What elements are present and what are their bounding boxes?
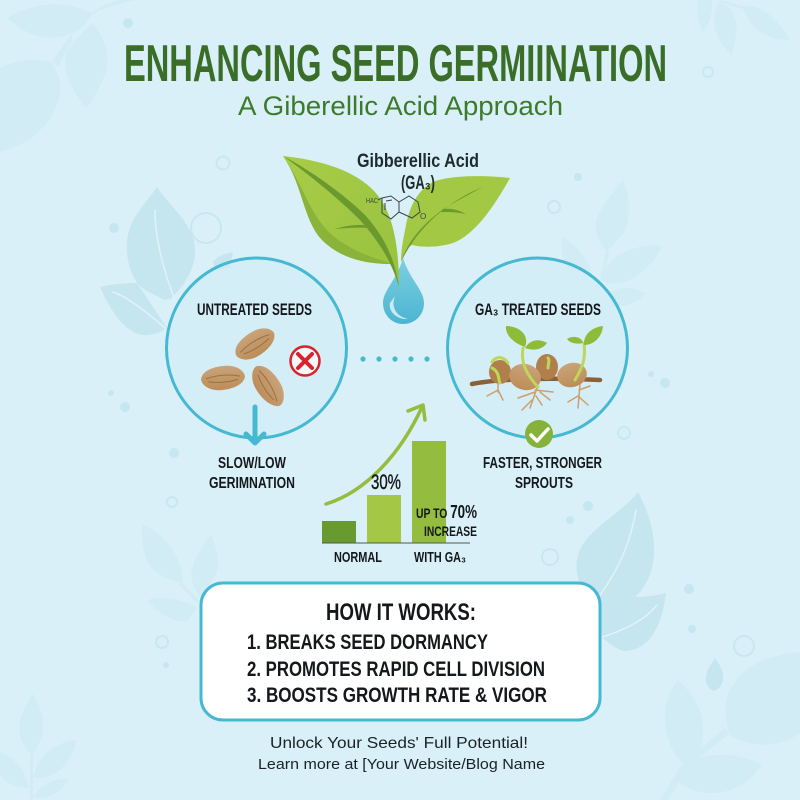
value: up to 70 percent increase: UP TO 70% bbox=[416, 502, 477, 522]
label: Gibberellic Acid: (GA₃) bbox=[401, 173, 435, 194]
background leaves: stronger bbox=[100, 187, 723, 691]
axis bbox=[322, 542, 470, 544]
chemical structure: HAC bbox=[366, 198, 378, 205]
icon: green check bbox=[525, 420, 553, 448]
icon: leaves with water drop bbox=[283, 156, 510, 324]
axis label: normal: NORMAL bbox=[334, 550, 382, 566]
footer text bbox=[258, 735, 545, 773]
label: faster stronger sprouts: SPROUTS bbox=[515, 475, 573, 492]
bar: with GA3 bbox=[412, 441, 446, 543]
value: up to 70 percent increase: INCREASE bbox=[424, 523, 477, 539]
connector dots bbox=[360, 356, 430, 362]
bar chart bbox=[322, 405, 477, 566]
icon: red cross bbox=[290, 346, 320, 376]
bar: 30 percent bbox=[367, 495, 401, 543]
value: 30 percent: 30% bbox=[371, 471, 401, 494]
label: Gibberellic Acid: Gibberellic Acid bbox=[357, 151, 479, 172]
list item 3: 3. BOOSTS GROWTH RATE & VIGOR bbox=[247, 683, 547, 707]
panel: how it works bbox=[201, 583, 600, 720]
label: slow germination: GERIMNATION bbox=[209, 475, 295, 492]
bar: normal bbox=[322, 521, 356, 543]
icon: right leaf bbox=[401, 176, 510, 262]
label: faster stronger sprouts bbox=[483, 455, 602, 492]
panel: untreated seeds bbox=[166, 258, 346, 438]
label: slow germination: SLOW/LOW bbox=[218, 455, 287, 472]
footer text: Learn more at [Your Website/Blog Name bbox=[258, 756, 545, 773]
heading: how it works: HOW IT WORKS: bbox=[326, 599, 476, 626]
label: slow germination bbox=[209, 455, 295, 492]
list item 1: 1. BREAKS SEED DORMANCY bbox=[247, 630, 488, 654]
axis label: with GA3: WITH GA₃ bbox=[414, 550, 466, 566]
heading: treated seeds: GA₃ TREATED SEEDS bbox=[475, 300, 601, 319]
footer text: Unlock Your Seeds' Full Potential! bbox=[270, 735, 528, 752]
arrow: down to slow germination bbox=[246, 407, 264, 443]
icon: left leaf bbox=[283, 156, 399, 287]
heading: untreated seeds: UNTREATED SEEDS bbox=[197, 300, 312, 319]
panel: treated seeds bbox=[448, 258, 628, 448]
value: up to 70 percent increase bbox=[416, 502, 477, 539]
background leaf veins bbox=[113, 210, 657, 637]
icon: dry seeds bbox=[200, 323, 290, 412]
icon: sprouting seeds bbox=[472, 326, 603, 410]
label: faster stronger sprouts: FASTER, STRONGER bbox=[483, 455, 602, 472]
icon: water drop bbox=[383, 258, 424, 324]
subtitle: A Giberellic Acid Approach bbox=[238, 91, 563, 121]
chemical structure bbox=[366, 196, 426, 221]
chemical structure: O bbox=[420, 212, 426, 221]
list item 2: 2. PROMOTES RAPID CELL DIVISION bbox=[247, 657, 545, 681]
label: Gibberellic Acid bbox=[357, 151, 479, 194]
arrow: growth curve bbox=[326, 405, 425, 504]
background bubbles bbox=[108, 18, 754, 668]
